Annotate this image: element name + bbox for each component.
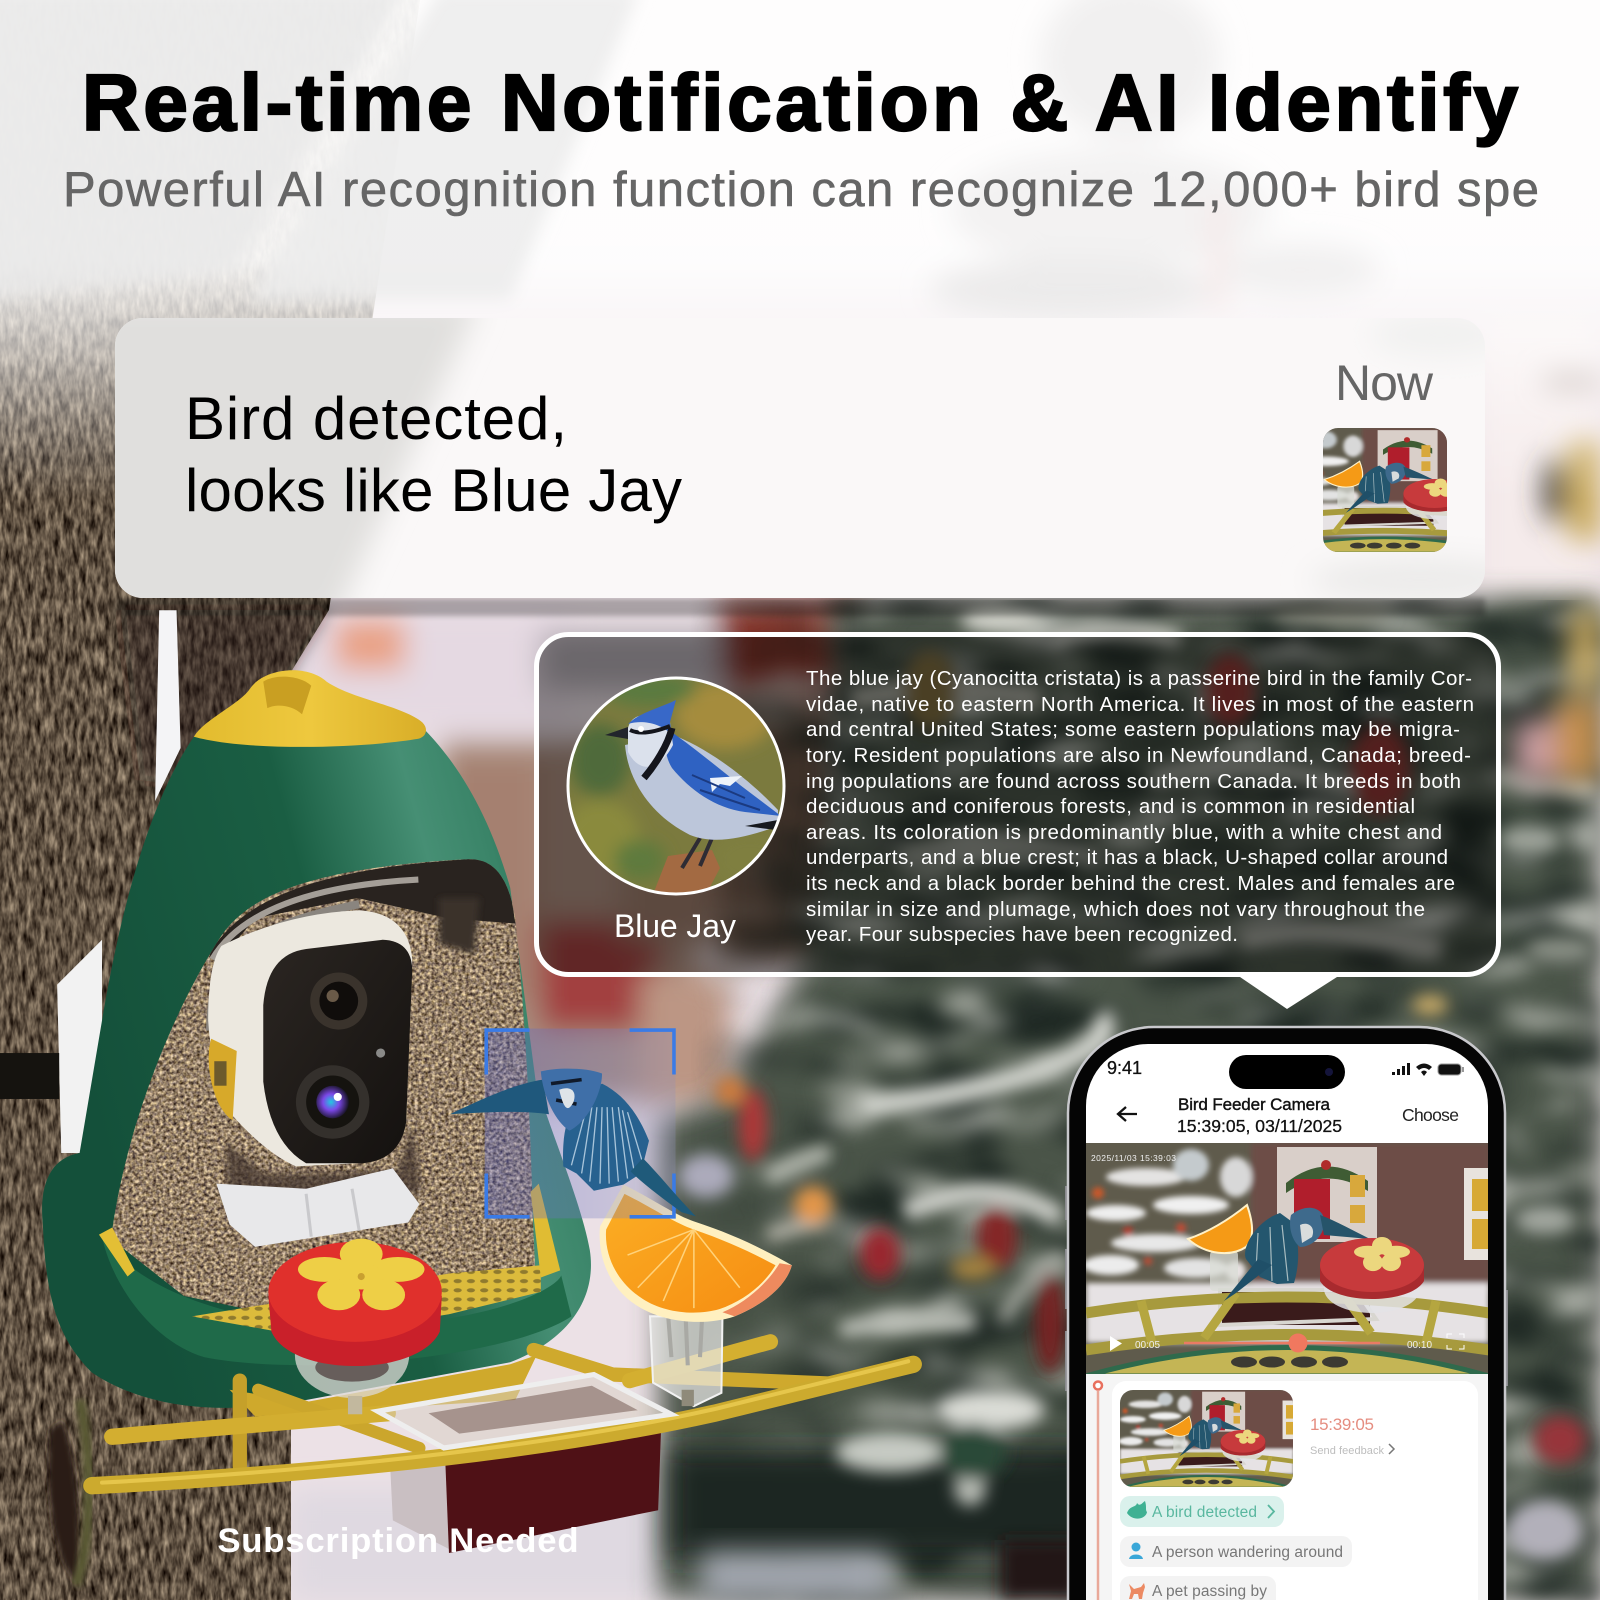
orange slice bbox=[600, 1185, 792, 1322]
app header: Choose bbox=[1402, 1105, 1459, 1125]
species description: deciduous and coniferous forests, and is common in residential bbox=[806, 795, 1415, 818]
speech bubble pointer bbox=[1240, 977, 1337, 1009]
species description: and central United States; some eastern populations may be migra- bbox=[806, 718, 1460, 741]
playback controls: 00:05 bbox=[1135, 1340, 1160, 1351]
chip: person bbox=[1120, 1536, 1352, 1567]
chip: pet bbox=[1120, 1576, 1276, 1600]
snowy pine tree bbox=[660, 600, 1600, 1600]
chip: bird detected: A bird detected bbox=[1152, 1504, 1257, 1521]
panel: notification card bbox=[114, 318, 1487, 619]
notification message: Bird detected, bbox=[185, 385, 567, 452]
notification message bbox=[185, 385, 682, 524]
species description: areas. Its coloration is predominantly blue, with a white chest and bbox=[806, 821, 1442, 844]
chip: person: A person wandering around bbox=[1152, 1544, 1343, 1561]
app header bbox=[1118, 1095, 1459, 1136]
species description bbox=[806, 667, 1474, 946]
timestamp: Now bbox=[1335, 355, 1434, 411]
white top fade with ghosted background bbox=[0, 0, 1600, 500]
acrylic fruit fork bbox=[650, 1316, 722, 1406]
event thumbnail bbox=[1119, 1390, 1294, 1488]
seed compartment bbox=[112, 859, 535, 1308]
status bar: 9:41 bbox=[1107, 1058, 1142, 1078]
video timestamp: 2025/11/03 15:39:03 bbox=[1091, 1153, 1176, 1163]
subtitle: Powerful AI recognition function can recognize 12,000+ bird spe bbox=[63, 163, 1539, 217]
event timeline bbox=[1086, 1374, 1488, 1600]
feedback link: Send feedback bbox=[1310, 1445, 1384, 1457]
feeder green body bbox=[42, 731, 591, 1408]
species description: vidae, native to eastern North America. It lives in most of the eastern bbox=[806, 693, 1474, 716]
chip: bird detected bbox=[1120, 1496, 1284, 1527]
antenna and mounting bracket bbox=[0, 610, 181, 1153]
species description: tory. Resident populations are also in Newfoundland, Canada; breed- bbox=[806, 744, 1471, 767]
playback controls: 00:10 bbox=[1407, 1340, 1432, 1351]
seed tray front bbox=[99, 1184, 571, 1416]
notification message: looks like Blue Jay bbox=[185, 457, 682, 524]
tree trunk bbox=[0, 0, 420, 1600]
red nectar feeder bbox=[268, 1239, 442, 1414]
smartphone mockup bbox=[1065, 1027, 1508, 1600]
species name: Blue Jay bbox=[614, 908, 736, 944]
yellow roof cap bbox=[194, 670, 426, 747]
panel: species information bbox=[536, 634, 1498, 1009]
app header: 15:39:05, 03/11/2025 bbox=[1177, 1116, 1342, 1136]
event time: 15:39:05 bbox=[1310, 1415, 1374, 1434]
species description: similar in size and plumage, which does not vary throughout the bbox=[806, 898, 1425, 921]
species description: its neck and a black border behind the crest. Males and females are bbox=[806, 872, 1455, 895]
camera bird feeder product bbox=[0, 610, 913, 1560]
species description: year. Four subspecies have been recognized. bbox=[806, 923, 1238, 946]
video player bbox=[1083, 1143, 1491, 1376]
security camera bbox=[208, 904, 419, 1247]
species description: ing populations are found across southern Canada. It breeds in both bbox=[806, 770, 1461, 793]
notification thumbnail bbox=[1323, 428, 1447, 552]
blue jay portrait bbox=[566, 676, 786, 896]
species description: The blue jay (Cyanocitta cristata) is a passerine bird in the family Cor- bbox=[806, 667, 1472, 690]
app header: Bird Feeder Camera bbox=[1178, 1095, 1331, 1114]
detection frame bbox=[485, 1029, 676, 1218]
subscription note: Subscription Needed bbox=[217, 1522, 579, 1560]
playback controls bbox=[1110, 1334, 1464, 1352]
red liquid reservoir bbox=[390, 1424, 661, 1553]
yellow perches bbox=[92, 1342, 913, 1486]
blue jay in flight bbox=[450, 1069, 696, 1216]
title: Real-time Notification & AI Identify bbox=[82, 58, 1518, 147]
species description: underparts, and a blue crest; it has a black, U-shaped collar around bbox=[806, 846, 1448, 869]
chip: pet: A pet passing by bbox=[1152, 1583, 1267, 1600]
status bar bbox=[1107, 1055, 1464, 1089]
acrylic jelly tray bbox=[378, 1374, 671, 1448]
